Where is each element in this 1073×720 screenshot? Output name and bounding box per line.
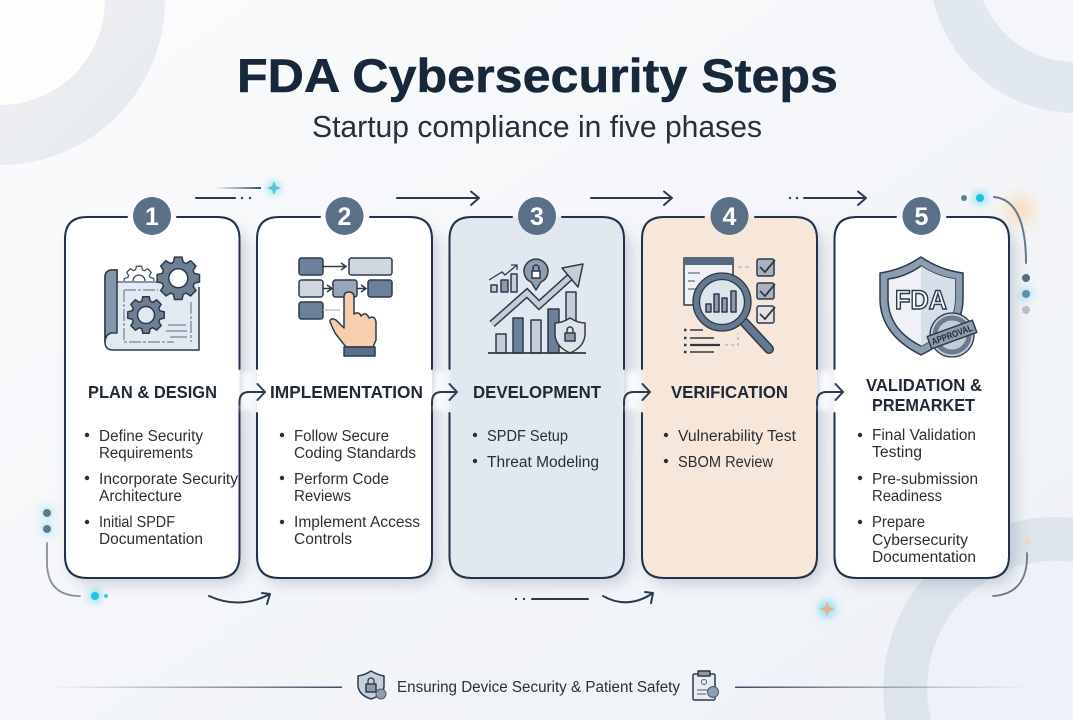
bullet list: Controls [294, 531, 352, 548]
number badge 1 [133, 197, 171, 235]
heading [866, 375, 982, 415]
icon: footer shield [358, 671, 386, 699]
decorative flow accents: top [196, 181, 281, 199]
bullet list: Follow Secure [294, 428, 389, 445]
panel: step 5 validation and premarket [834, 197, 1015, 584]
number badge 1: 1 [145, 203, 159, 231]
arrow: bottom left curved [209, 593, 270, 604]
heading: IMPLEMENTATION [270, 382, 423, 402]
bullet list [85, 428, 238, 548]
bullet list [664, 428, 797, 471]
icon: FDA shield with approval stamp: APPROVAL [930, 323, 974, 348]
decorative corner arc: bottom right [883, 517, 1073, 720]
bullet list: Pre-submission [872, 471, 978, 488]
heading: PLAN & DESIGN [88, 382, 217, 402]
panel: step 3 development [450, 197, 631, 584]
bullet list [280, 428, 420, 548]
arrow: step 2 to step 3 [432, 372, 457, 410]
arrow: top 2 to 3 [397, 192, 479, 205]
panel: step 4 verification [642, 197, 823, 584]
bullet list: Incorporate Security [99, 471, 238, 488]
icon: FDA shield with approval stamp [880, 257, 977, 357]
bullet list: Documentation [872, 549, 976, 566]
footer [48, 671, 1030, 700]
number badge 2: 2 [338, 203, 351, 231]
bullet list: Final Validation [872, 427, 976, 444]
bullet list: Initial SPDF [99, 514, 175, 531]
panel: step 2 implementation [257, 197, 438, 584]
decorative accent: bottom right curve [993, 538, 1030, 596]
panel: step 1 plan and design [65, 197, 246, 584]
arrow: bottom centre dashed [515, 598, 588, 600]
number badge 4 [710, 197, 748, 235]
arrow: step 3 to step 4 [624, 372, 650, 410]
heading: VALIDATION & [866, 375, 982, 395]
decorative corner arc: top left [0, 0, 165, 165]
arrow: step 4 to step 5 [817, 372, 843, 410]
number badge 5 [902, 197, 940, 235]
bullet list: Vulnerability Test [678, 428, 797, 445]
icon: FDA shield with approval stamp: FDA [895, 285, 947, 315]
decorative corner arc: top right [933, 0, 1073, 113]
bullet list: Documentation [99, 531, 203, 548]
bullet list [473, 428, 599, 471]
bullet list: Architecture [99, 488, 182, 505]
decorative sparkle [818, 600, 836, 618]
icon: flow diagram with hand [299, 258, 392, 356]
number badge 3 [518, 197, 556, 235]
bullet list: Readiness [872, 488, 942, 505]
number badge 3: 3 [530, 203, 544, 231]
bullet list: Threat Modeling [487, 454, 599, 471]
icon: footer clipboard [693, 671, 718, 700]
number badge 5: 5 [915, 203, 929, 231]
bullet list: Prepare [872, 514, 925, 531]
title: FDA Cybersecurity Steps [237, 49, 838, 102]
bullet list: Requirements [99, 445, 193, 462]
heading: DEVELOPMENT [473, 382, 601, 402]
heading: PREMARKET [872, 395, 975, 415]
bullet list: Implement Access [294, 514, 420, 531]
decorative accent: bottom left curve and dots [40, 506, 108, 603]
bullet list: Coding Standards [294, 445, 416, 462]
bullet list [858, 427, 978, 566]
arrow: top 3 to 4 [591, 192, 672, 205]
bullet list: Reviews [294, 488, 351, 505]
arrow: top 4 to 5 [789, 192, 866, 205]
number badge 2 [326, 197, 364, 235]
bullet list: Define Security [99, 428, 203, 445]
arrow: bottom centre curved [603, 592, 653, 603]
icon: growth chart with lock and shield [488, 259, 586, 353]
subtitle: Startup compliance in five phases [312, 109, 762, 144]
bullet list: SBOM Review [678, 454, 774, 471]
icon: magnifier with checklist [684, 258, 775, 352]
bullet list: Testing [872, 444, 922, 461]
bullet list: SPDF Setup [487, 428, 568, 445]
decorative accent: top right curve and dots [961, 191, 1034, 314]
heading: VERIFICATION [671, 382, 788, 402]
footer text: Ensuring Device Security & Patient Safety [397, 679, 680, 696]
icon: blueprint with gears [105, 257, 199, 350]
bullet list: Cybersecurity [872, 532, 968, 549]
bullet list: Perform Code [294, 471, 389, 488]
arrow: step 1 to step 2 [240, 372, 265, 410]
number badge 4: 4 [723, 203, 737, 231]
